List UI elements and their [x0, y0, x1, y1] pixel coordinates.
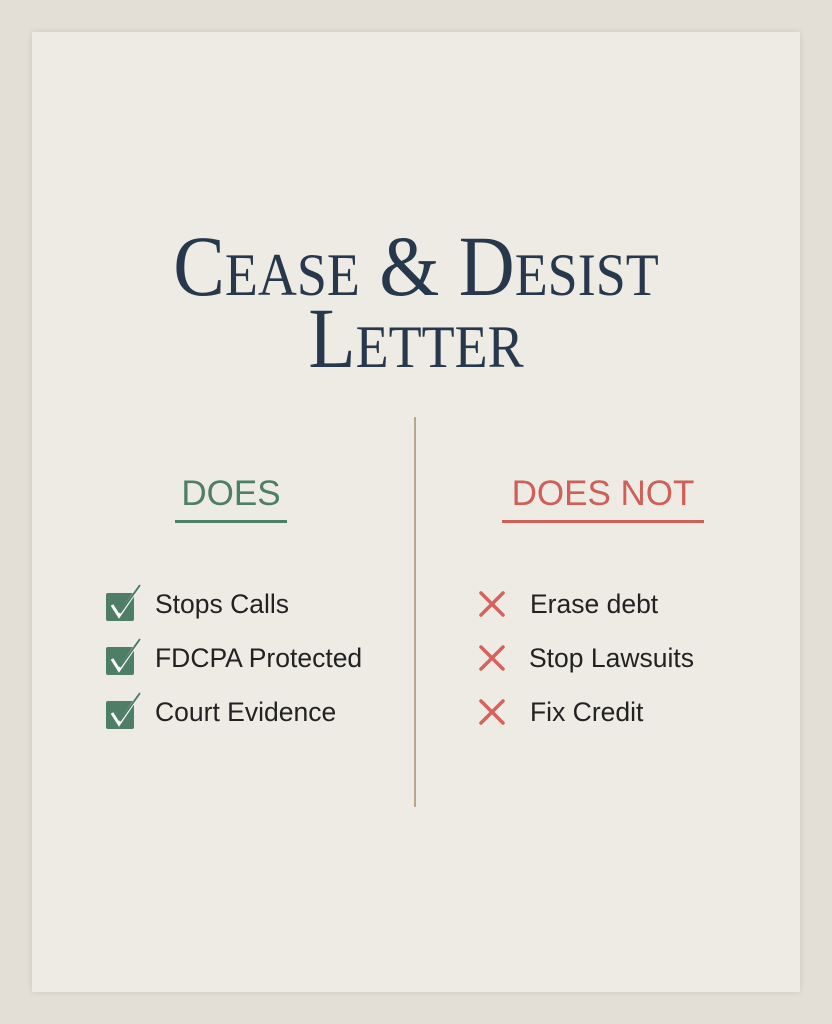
item: erase debt: Erase debt [530, 589, 658, 619]
list: does not [479, 589, 694, 727]
item: stops calls [106, 584, 289, 621]
title [173, 218, 659, 386]
item: fix credit [479, 697, 644, 727]
title: Letter [308, 290, 524, 386]
divider [414, 417, 416, 807]
item: stops calls: Stops Calls [155, 589, 289, 619]
item: fdcpa [106, 638, 362, 675]
item: court evidence: Court Evidence [155, 697, 336, 727]
item: stop lawsuits: Stop Lawsuits [529, 643, 694, 673]
item: fix credit: Fix Credit [530, 697, 643, 727]
title: Cease & Desist [173, 218, 659, 314]
item: court evidence [106, 692, 336, 729]
heading: does not: DOES NOT [512, 474, 694, 513]
heading: does: DOES [181, 474, 281, 513]
list: does [106, 584, 362, 729]
item: fdcpa: FDCPA Protected [155, 643, 362, 673]
